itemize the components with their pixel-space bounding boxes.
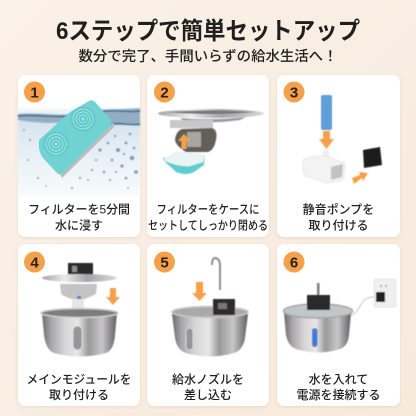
caption 2 line 2: セットしてしっかり閉める: [148, 218, 268, 232]
photo: filter soaking in water: [18, 100, 140, 196]
caption 5: 給水ノズルを: [172, 372, 244, 386]
caption 5 line 2: 差し込む: [184, 388, 232, 402]
filter cartridge: [39, 100, 114, 178]
caption 4: メインモジュールを: [26, 372, 132, 386]
illustration: fountain plugged in: [284, 279, 396, 352]
panel: step 1: [18, 75, 140, 237]
illustration: main module above bowl: [41, 263, 120, 356]
badge 5: 5: [160, 254, 169, 272]
badge 5: [154, 252, 175, 272]
badge 3: 3: [290, 84, 298, 102]
illustration: filter into case: [158, 109, 264, 174]
badge 4: [24, 252, 45, 272]
badge 2: [154, 82, 175, 102]
caption 1 line 2: 水に浸す: [55, 218, 103, 232]
badge 3: [284, 82, 304, 102]
panel: step 4: [18, 244, 140, 406]
badge 4: 4: [30, 254, 39, 272]
panel: step 2: [147, 75, 269, 237]
title: 6ステップで簡単セットアップ: [56, 18, 360, 45]
caption 2: フィルターをケースに: [156, 202, 260, 216]
caption 1: フィルターを5分間: [28, 202, 130, 216]
panel: step 3: [277, 75, 400, 237]
illustration: pump: [303, 95, 382, 184]
caption 6 line 2: 電源を接続する: [296, 387, 381, 402]
panel: step 5: [147, 244, 269, 406]
subtitle: 数分で完了、手間いらずの給水生活へ！: [78, 48, 338, 65]
caption 4 line 2: 取り付ける: [49, 388, 109, 402]
badge 2: 2: [160, 84, 169, 102]
caption 6: 水を入れて: [309, 372, 368, 386]
badge 1: [24, 82, 45, 102]
badge 1: 1: [30, 84, 39, 102]
caption 3 line 2: 取り付ける: [308, 218, 369, 232]
panel: step 6: [277, 244, 400, 406]
arrow up: [178, 134, 190, 149]
illustration: nozzle into fountain: [172, 258, 248, 356]
badge 6: 6: [290, 254, 298, 272]
badge 6: [284, 252, 304, 272]
caption 3: 静音ポンプを: [303, 202, 374, 216]
